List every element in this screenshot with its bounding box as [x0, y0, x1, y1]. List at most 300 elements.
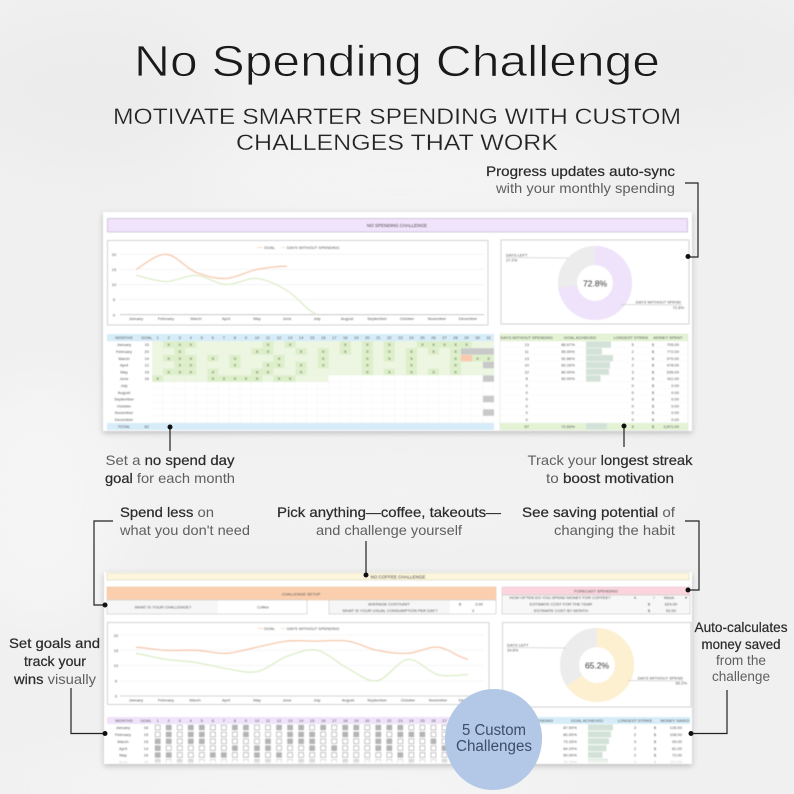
table: checkbox tracker: February — [115, 732, 131, 737]
table: money saved: 99.00 — [672, 739, 683, 744]
table: no spend days by month: 7 — [223, 335, 226, 340]
table: no spend days by month: August — [118, 390, 131, 395]
table: no spend days by month — [107, 334, 494, 430]
table: no spend days by month: 26 — [431, 335, 436, 340]
donut chart: 72.8%: 72.8% — [583, 278, 607, 288]
table: money saved — [538, 716, 690, 764]
connector: progress callout to donut — [685, 183, 698, 259]
table: checkbox tracker: 5 — [201, 718, 204, 723]
table: no spend days by month: 1 — [157, 335, 160, 340]
invalid date cells — [461, 351, 494, 413]
line chart: goal vs days without spending: February — [158, 316, 174, 321]
line chart: coffee goal vs days: 5 — [115, 678, 118, 684]
table: streak and money spent — [500, 334, 688, 430]
table: streak and money spent: 5 — [632, 342, 635, 347]
table: checkbox tracker: MONTHS — [115, 718, 133, 723]
callout: saving potential — [522, 504, 675, 538]
forecast spending block: ESTIMATE COST BY MONTH — [534, 608, 588, 613]
table: no spend days by month: 14 — [299, 335, 304, 340]
table: checkbox tracker: 17 — [332, 718, 337, 723]
table: streak and money spent: 50.00% — [561, 376, 575, 381]
table: no spend days by month: February — [116, 349, 132, 354]
callout: progress updates auto-sync — [486, 163, 675, 196]
table: streak and money spent: 0 — [632, 417, 635, 422]
sheet heading: NO COFFEE CHALLENGE — [371, 574, 425, 579]
donut chart: 65.2%: DAYS LEFT — [507, 642, 529, 648]
table: no spend days by month: 13 — [288, 335, 293, 340]
donut chart: 65.2%: 65.2% — [676, 680, 687, 686]
table: streak and money spent: 478.00 — [667, 363, 680, 368]
callout: no spend day goal: goal for each month — [105, 470, 235, 486]
table: checkbox tracker: 3 — [179, 718, 182, 723]
table: streak and money spent: $ — [652, 363, 655, 368]
table: streak and money spent: 5 — [632, 424, 635, 429]
table: money saved: 73.33% — [563, 739, 577, 744]
table: money saved: 2 — [634, 746, 637, 751]
table: no spend days by month: May — [120, 369, 128, 374]
table: streak and money spent: 0 — [526, 397, 529, 402]
challenge setup block: 3 — [472, 608, 475, 613]
line chart: coffee goal vs days: May — [253, 698, 261, 702]
table: streak and money spent: GOAL ACHIEVED — [564, 335, 596, 340]
table: checkbox tracker: 18 — [343, 718, 348, 723]
forecast spending block: 52.00 — [666, 608, 677, 613]
table: streak and money spent: $ — [652, 376, 655, 381]
callout: no spend day goal: Set a no spend day — [106, 452, 235, 468]
table: money saved: 72.22% — [563, 760, 577, 764]
line chart: coffee goal vs days: January — [129, 698, 143, 702]
table: money saved: 108.00 — [670, 732, 683, 737]
table: checkbox tracker: 10 — [255, 718, 260, 723]
donut chart: 65.2%: DAYS WITHOUT SPEND — [638, 676, 683, 680]
line chart: coffee goal vs days: April — [222, 698, 230, 702]
table: streak and money spent: 5 — [632, 376, 635, 381]
table: streak and money spent: MONEY SPENT — [653, 335, 683, 340]
donut chart: 65.2%: 65.2% — [585, 660, 609, 670]
table: no spend days by month: March — [118, 356, 130, 361]
table: checkbox tracker: 11 — [266, 718, 271, 723]
table: no spend days by month: 16 — [321, 335, 326, 340]
table: no spend days by month: XXXXXXXXXXXXX — [167, 356, 490, 361]
table: streak and money spent: 0.00 — [671, 397, 680, 402]
table: streak and money spent: 13 — [524, 356, 530, 361]
table: no spend days by month: September — [114, 397, 134, 402]
table: money saved: $ — [654, 760, 657, 764]
table: no spend days by month: XXXXXXXXXXXXX — [167, 342, 468, 347]
table: no spend days by month: 2 — [168, 335, 171, 340]
callout: longest streak — [528, 452, 694, 486]
callout: longest streak: Track your longest streak — [528, 452, 694, 468]
table: checkbox tracker: 6 — [212, 718, 215, 723]
table: no spend days by month: 9 — [245, 335, 248, 340]
goal achieved data bars — [588, 728, 613, 762]
line chart: goal vs days without spending: GOAL — [264, 245, 276, 250]
line chart: goal vs days without spending: 20 — [112, 252, 117, 257]
table: streak and money spent: $ — [652, 390, 655, 395]
table: no spend days by month: 12 — [144, 363, 150, 368]
table: no spend days by month: December — [115, 417, 134, 422]
table: no spend days by month: 16 — [144, 376, 150, 381]
table: money saved: 72.00 — [672, 753, 683, 758]
table: streak and money spent: $ — [652, 383, 655, 388]
table: no spend days by month: 10 — [255, 335, 260, 340]
table: checkbox tracker: April — [119, 746, 127, 751]
table: streak and money spent: 67 — [524, 424, 530, 429]
table: streak and money spent: 0 — [526, 383, 529, 388]
table: no spend days by month: 23 — [398, 335, 403, 340]
connector: streak callout to table — [622, 424, 626, 447]
table: no spend days by month: 3 — [179, 335, 182, 340]
table: streak and money spent: 0.00 — [671, 390, 680, 395]
table: money saved: DAYS WITHOUT SPENDING — [501, 718, 553, 723]
table: no spend days by month: 8 — [234, 335, 237, 340]
subtitle: MOTIVATE SMARTER SPENDING WITH CUSTOM — [113, 104, 681, 129]
callout: auto-calculates — [694, 619, 788, 684]
donut chart: 72.8%: DAYS WITHOUT SPEND — [636, 300, 681, 304]
line chart: goal vs days without spending: 10 — [112, 282, 117, 287]
donut chart: 65.2% — [502, 622, 691, 707]
table: money saved: GOAL ACHIEVED — [571, 718, 603, 723]
table: checkbox tracker: 16 — [144, 725, 149, 730]
table: streak and money spent: 3 — [632, 356, 635, 361]
line chart: goal vs days without spending: August — [341, 316, 354, 321]
table: no spend days by month: 15 — [144, 369, 150, 374]
table: streak and money spent: $ — [652, 424, 655, 429]
table: streak and money spent: 970.00 — [667, 356, 680, 361]
table: no spend days by month: XXXXXXXX — [156, 376, 292, 381]
table: streak and money spent: $ — [652, 356, 655, 361]
table: money saved: $ — [654, 732, 657, 737]
table: no spend days by month: 31 — [486, 335, 492, 340]
table: no spend days by month: 28 — [453, 335, 458, 340]
table: streak and money spent: 705.00 — [667, 342, 680, 347]
table: streak and money spent: $ — [652, 410, 655, 415]
line chart: goal vs days without spending: June — [283, 316, 292, 321]
callout: auto-calculates: from the — [716, 652, 766, 668]
table: money saved: $ — [654, 753, 657, 758]
table: streak and money spent: 3 — [632, 369, 635, 374]
challenge setup block: Coffee — [257, 604, 270, 609]
table: streak and money spent: 12 — [524, 369, 530, 374]
line chart: coffee goal vs days: DAYS WITHOUT SPENDING — [287, 626, 339, 631]
table: checkbox tracker: 9 — [245, 718, 248, 723]
table: streak and money spent: 3,871.00 — [663, 424, 680, 429]
table: streak and money spent: 0 — [526, 403, 529, 408]
table: streak and money spent: 772.00 — [667, 349, 680, 354]
table: checkbox tracker: 22 — [387, 718, 392, 723]
table: streak and money spent: $ — [652, 369, 655, 374]
line chart: coffee goal vs days: 20 — [114, 633, 119, 638]
table: checkbox tracker: 12 — [277, 718, 282, 723]
forecast spending block: / — [653, 595, 655, 600]
table: streak and money spent: 92.86% — [561, 356, 575, 361]
goal achieved data bars — [586, 345, 613, 426]
table: no spend days by month: January — [117, 342, 131, 347]
table: no spend days by month: 27 — [442, 335, 447, 340]
callout: progress updates auto-sync: with your monthly spending — [495, 180, 675, 196]
table: no spend days by month: November — [115, 410, 134, 415]
challenge setup block: 3.00 — [475, 602, 484, 606]
subtitle — [113, 104, 681, 155]
line chart: goal vs days without spending: March — [190, 316, 202, 321]
table: streak and money spent: $ — [652, 349, 655, 354]
table: checkbox tracker: 16 — [321, 718, 326, 723]
forecast spending block: HOW OFTEN DO YOU SPEND MONEY FOR COFFEE? — [510, 595, 611, 600]
table: streak and money spent: 0 — [526, 410, 529, 415]
table: checkbox tracker: 15 — [310, 718, 315, 723]
title: No Spending Challenge — [134, 37, 660, 86]
table: no spend days by month: 19 — [354, 335, 359, 340]
line chart: coffee goal vs days: 0 — [115, 694, 118, 698]
table: money saved: 50.00% — [563, 753, 577, 758]
table: no spend days by month: 11 — [266, 335, 271, 340]
callout: saving potential: changing the habit — [554, 522, 675, 538]
table: money saved: $ — [654, 739, 657, 744]
table: no spend days by month: 25 — [420, 335, 425, 340]
donut chart: 72.8% — [501, 240, 689, 324]
table: streak and money spent: 0 — [632, 403, 635, 408]
checked boxes — [155, 728, 447, 762]
challenge setup block — [107, 587, 496, 614]
table: checkbox tracker: 27 — [442, 718, 447, 723]
table: checkbox tracker: 20 — [365, 718, 370, 723]
table: money saved: 87.50% — [563, 725, 577, 730]
table: no spend days by month: October — [117, 403, 132, 408]
line chart: goal vs days without spending: September — [367, 316, 387, 321]
highlighted no-spend cells — [152, 345, 494, 379]
table: streak and money spent: LONGEST STRIKE — [614, 335, 649, 340]
table: checkbox tracker: March — [117, 739, 129, 744]
badge: 5 custom challenges: Challenges — [456, 738, 532, 755]
table: checkbox tracker: January — [116, 725, 130, 730]
table: checkbox tracker: May — [119, 753, 127, 758]
callout: set goals: track your — [24, 653, 86, 669]
table: streak and money spent: DAYS WITHOUT SPENDING — [501, 335, 553, 340]
line chart: coffee goal vs days: September — [367, 698, 387, 702]
table: no spend days by month: 18 — [343, 335, 348, 340]
challenge setup block: WHAT IS YOUR USUAL CONSUMPTION PER DAY? — [343, 608, 438, 613]
callout: progress updates auto-sync: Progress updates auto-sync — [486, 163, 675, 179]
table: checkbox tracker: June — [119, 760, 128, 764]
callout: auto-calculates: money saved — [702, 636, 780, 652]
forecast spending block — [502, 587, 690, 614]
line chart: goal vs days without spending: November — [428, 316, 447, 321]
table: no spend days by month: XXXXXXXXXX — [178, 363, 457, 368]
table: no spend days by month: 6 — [212, 335, 215, 340]
table: checkbox tracker: 1 — [157, 718, 160, 723]
donut chart: 72.8%: 72.8% — [673, 305, 684, 310]
table: no spend days by month: 30 — [475, 335, 481, 340]
sheet heading: NO SPENDING CHALLENGE — [367, 223, 427, 228]
table: checkbox tracker: 15 — [144, 732, 149, 737]
table: money saved: 64.29% — [563, 746, 577, 751]
table: streak and money spent: 0 — [632, 397, 635, 402]
table: money saved: 3 — [634, 739, 637, 744]
table: money saved: 2 — [634, 732, 637, 737]
table: money saved: LONGEST STRIKE — [618, 718, 653, 723]
table: streak and money spent: 0 — [632, 383, 635, 388]
line chart: coffee goal vs days: March — [189, 698, 201, 702]
line chart: coffee goal vs days: 10 — [114, 663, 119, 668]
challenge setup block: CHALLENGE SETUP — [282, 591, 321, 596]
challenge setup block: WHAT IS YOUR CHALLENGE? — [135, 604, 192, 609]
line chart: coffee goal vs days: June — [283, 698, 292, 702]
callout: set goals — [9, 635, 100, 687]
connector: saving potential to forecast — [685, 521, 699, 592]
forecast spending block: 4 — [634, 595, 637, 600]
callout: pick anything: and challenge yourself — [316, 522, 462, 538]
table: streak and money spent: $ — [652, 342, 655, 347]
table: no spend days by month: 20 — [144, 349, 150, 354]
table: no spend days by month: 14 — [144, 356, 150, 361]
connector: goal callout to table — [168, 424, 172, 451]
table: no spend days by month: 24 — [409, 335, 414, 340]
line chart: goal vs days without spending: DAYS WITHOUT SPENDING — [287, 245, 339, 250]
table: no spend days by month: 15 — [144, 342, 150, 347]
callout: pick anything: Pick anything—coffee, takeouts— — [277, 504, 501, 520]
table: checkbox tracker: 2 — [168, 718, 171, 723]
table: money saved: 4 — [634, 760, 637, 764]
callout: longest streak: to boost motivation — [546, 470, 674, 486]
line chart: coffee goal vs days: August — [342, 698, 355, 702]
table: checkbox tracker: 7 — [223, 718, 226, 723]
table: streak and money spent: 80.00% — [561, 369, 575, 374]
challenge setup block: AVERAGE COST/UNIT — [368, 602, 410, 606]
table: checkbox tracker: 26 — [431, 718, 436, 723]
sheet heading — [108, 218, 688, 232]
connector: spend less to challenge setup — [94, 521, 113, 608]
table: streak and money spent: $ — [652, 417, 655, 422]
line chart: coffee goal vs days: 15 — [114, 648, 119, 653]
forecast spending block: ▾ — [685, 595, 687, 600]
table: checkbox tracker: 14 — [299, 718, 304, 723]
line chart: goal vs days without spending: April — [222, 316, 230, 321]
callout: spend less: Spend less on — [120, 504, 214, 520]
table: streak and money spent: 2 — [632, 349, 635, 354]
table: streak and money spent: 11 — [525, 349, 530, 354]
forecast spending block: ESTIMATE COST FOR THE YEAR — [530, 602, 592, 606]
connector: pick anything to heading — [364, 541, 368, 578]
table: no spend days by month: 20 — [365, 335, 370, 340]
table: streak and money spent: $ — [652, 397, 655, 402]
line chart: coffee goal vs days: July — [313, 698, 321, 702]
table: streak and money spent: 83.33% — [561, 363, 575, 368]
table: streak and money spent: 535.00 — [667, 369, 680, 374]
table: checkbox tracker: 21 — [376, 718, 381, 723]
forecast spending block: FORECAST SPENDING — [574, 589, 618, 594]
table: checkbox tracker: 13 — [288, 718, 293, 723]
line chart: coffee goal vs days: GOAL — [264, 626, 276, 631]
line chart: coffee goal vs days — [108, 622, 489, 704]
table: money saved: 2 — [634, 753, 637, 758]
table: money saved: MONEY SAVED — [661, 718, 690, 723]
panel: no coffee challenge sheet — [104, 572, 692, 765]
table: no spend days by month: June — [120, 376, 129, 381]
table: money saved: $ — [654, 746, 657, 751]
table: no spend days by month: 4 — [190, 335, 193, 340]
table: checkbox tracker: 25 — [420, 718, 425, 723]
forecast spending block: 624.00 — [665, 602, 678, 606]
line chart: goal vs days without spending: July — [313, 316, 321, 321]
callout: auto-calculates: challenge — [712, 668, 770, 684]
table: streak and money spent: 8 — [526, 376, 529, 381]
callout: set goals: wins visually — [13, 671, 96, 687]
table: streak and money spent: 10 — [524, 363, 530, 368]
line chart: goal vs days without spending: December — [459, 316, 478, 321]
table: checkbox tracker: 8 — [234, 718, 237, 723]
table: checkbox tracker: GOAL — [140, 718, 152, 723]
table: money saved: 81.00 — [672, 746, 683, 751]
line chart: goal vs days without spending: 15 — [112, 267, 117, 272]
challenge setup block: $ — [459, 602, 462, 606]
line chart: coffee goal vs days: December — [459, 698, 478, 702]
table: no spend days by month: 12 — [277, 335, 282, 340]
table: money saved: $ — [654, 725, 657, 730]
callout: spend less — [119, 504, 250, 538]
table: checkbox tracker: 18 — [144, 760, 149, 764]
table: checkbox tracker: 19 — [354, 718, 359, 723]
table: checkbox tracker — [106, 716, 450, 764]
table: streak and money spent: 55.00% — [561, 349, 575, 354]
donut chart: 72.8%: 27.2% — [506, 258, 518, 262]
table: streak and money spent: 0 — [632, 410, 635, 415]
callout: pick anything — [277, 504, 501, 538]
table: streak and money spent: $ — [652, 403, 655, 408]
table: no spend days by month: 82 — [144, 424, 150, 429]
table: money saved: 126.00 — [670, 725, 683, 730]
table: streak and money spent: 2 — [632, 363, 635, 368]
connector: auto-calculates to money saved — [688, 690, 727, 736]
table: no spend days by month: 17 — [332, 335, 337, 340]
line chart: goal vs days without spending: May — [253, 316, 261, 321]
table: no spend days by month: 15 — [310, 335, 315, 340]
forecast spending block: Week — [664, 595, 674, 600]
table: streak and money spent: 0 — [526, 390, 529, 395]
table: streak and money spent: 0.00 — [671, 417, 680, 422]
table: streak and money spent: 0 — [632, 390, 635, 395]
table: money saved: 117.00 — [670, 760, 683, 764]
table: no spend days by month: 21 — [376, 335, 381, 340]
table: no spend days by month: 22 — [387, 335, 392, 340]
table: no spend days by month: 29 — [464, 335, 469, 340]
table: checkbox tracker: 24 — [409, 718, 414, 723]
table: checkbox tracker: 16 — [144, 753, 149, 758]
table: streak and money spent: 0.00 — [671, 383, 680, 388]
table: no spend days by month: 5 — [201, 335, 204, 340]
table: no spend days by month: XXXXXXXXXXX — [178, 349, 457, 354]
callout: spend less: what you don't need — [119, 522, 250, 538]
forecast spending block: $ — [648, 608, 651, 613]
table: checkbox tracker: 4 — [190, 718, 193, 723]
callout: saving potential: See saving potential of — [522, 504, 675, 520]
line chart: coffee goal vs days: October — [401, 698, 416, 702]
table: no spend days by month: TOTAL — [118, 424, 131, 429]
connector: set goals to tracker — [71, 688, 108, 736]
table: no spend days by month: April — [120, 363, 128, 368]
panel: no spending challenge sheet — [103, 212, 692, 431]
line chart: goal vs days without spending: January — [129, 316, 143, 321]
donut chart: 65.2%: 34.8% — [507, 648, 519, 652]
line chart: coffee goal vs days: February — [158, 698, 174, 702]
table: streak and money spent: 0.00 — [671, 403, 680, 408]
table: streak and money spent: 72.83% — [561, 424, 575, 429]
table: no spend days by month: GOAL — [141, 335, 153, 340]
badge: 5 custom challenges: 5 Custom — [462, 722, 526, 739]
table: checkbox tracker: 23 — [398, 718, 403, 723]
sheet heading — [107, 573, 689, 580]
table: money saved: 3 — [634, 725, 637, 730]
table: money saved: 80.00% — [563, 732, 577, 737]
